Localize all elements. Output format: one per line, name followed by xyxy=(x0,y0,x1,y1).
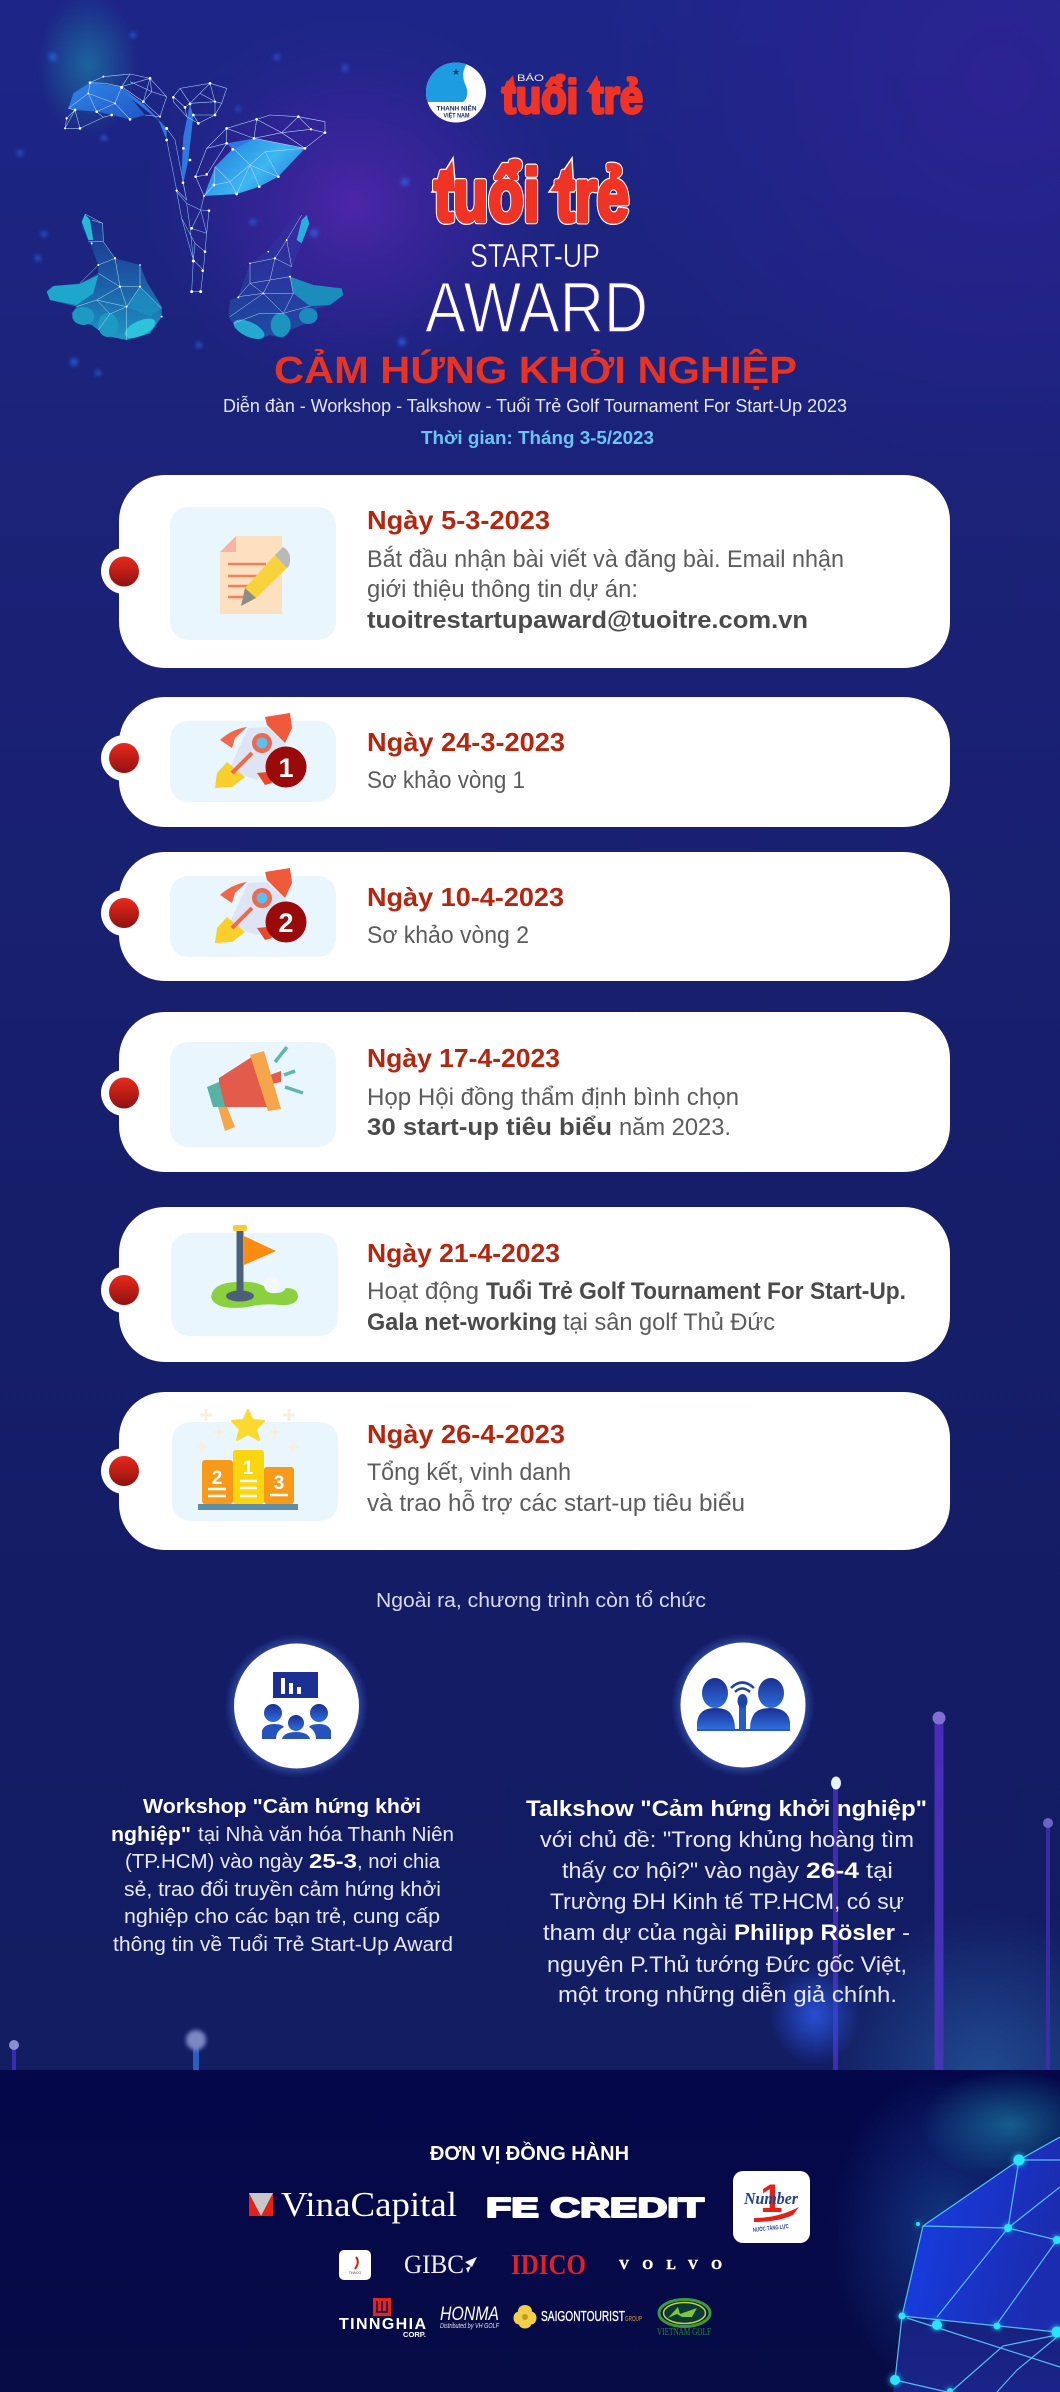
description: Hoạt động xyxy=(367,1278,479,1305)
description: Bắt đầu nhận bài viết và đăng bài. Email nhận xyxy=(367,546,844,573)
icon: podium with star xyxy=(172,1409,338,1521)
logo: Saigontourist xyxy=(514,2305,642,2328)
panel: footer xyxy=(0,2070,1060,2392)
sponsors heading: ĐƠN VỊ ĐỒNG HÀNH xyxy=(430,2141,629,2165)
text: talkshow: nguyên P.Thủ tướng Đức gốc Việt, xyxy=(547,1952,907,1977)
text: workshop: nghiệp cho các bạn trẻ, cung cấp xyxy=(124,1906,440,1928)
panel: card 17-4-2023 xyxy=(101,1012,950,1172)
description xyxy=(367,546,844,634)
description: Sơ khảo vòng 2 xyxy=(367,922,529,949)
description: Họp Hội đồng thẩm định bình chọn xyxy=(367,1084,739,1111)
logo: VinaCapital: VinaCapital xyxy=(281,2185,457,2224)
logo: IDICO: IDICO xyxy=(511,2250,586,2281)
description: giới thiệu thông tin dự án: xyxy=(367,576,638,603)
text: talkshow: Talkshow "Cảm hứng khởi nghiệp" xyxy=(526,1796,927,1821)
icon: podium with star: 1 xyxy=(243,1458,254,1479)
mesh globe xyxy=(890,2137,1060,2392)
date: Ngày 5-3-2023 xyxy=(367,505,550,535)
description: năm 2023. xyxy=(619,1114,731,1141)
logo: Báo Tuổi Trẻ: tuổi trẻ xyxy=(502,70,643,123)
text: workshop: 25-3 xyxy=(309,1851,357,1873)
description: tại sân golf Thủ Đức xyxy=(563,1309,775,1336)
description: và trao hỗ trợ các start-up tiêu biểu xyxy=(367,1490,745,1517)
text: talkshow: Philipp Rösler xyxy=(734,1920,895,1945)
text: workshop: sẻ, trao đổi truyền cảm hứng khởi xyxy=(124,1879,441,1901)
title logo: Tuổi Trẻ: tuổi trẻ xyxy=(434,154,629,237)
icon: workshop circle xyxy=(224,1634,368,1778)
icon: talkshow circle xyxy=(671,1633,815,1777)
description xyxy=(367,1278,906,1336)
middle leaf xyxy=(173,83,227,183)
logo: Thanh Niên Việt Nam: ★ xyxy=(452,67,460,77)
logo: Number 1: Number xyxy=(743,2189,798,2208)
text: talkshow: - xyxy=(902,1920,910,1945)
logo: GIBC: GIBC xyxy=(404,2250,464,2279)
right hand xyxy=(228,215,343,343)
timeline dot xyxy=(109,1275,139,1305)
logo: Saigontourist: SAIGONTOURIST xyxy=(541,2308,625,2325)
icon: rocket 2: 2 xyxy=(278,908,294,938)
logo: Honma: Distributed by VH GOLF xyxy=(440,2323,500,2330)
heading: Cảm hứng khởi nghiệp: CẢM HỨNG KHỞI NGHIỆP xyxy=(274,348,797,392)
icon: golf flag xyxy=(171,1225,338,1336)
title logo: Tuổi Trẻ: tuổi trẻ xyxy=(434,154,629,237)
logo: Thanh Niên Việt Nam: VIỆT NAM xyxy=(444,112,470,120)
text: talkshow xyxy=(526,1796,927,2007)
logo: Tin Nghia xyxy=(339,2298,426,2339)
date: Ngày 10-4-2023 xyxy=(367,882,564,912)
timeline dot xyxy=(109,743,139,773)
description: Tuổi Trẻ Golf Tournament For Start-Up. xyxy=(486,1278,906,1305)
subtitle: Diễn đàn - Workshop - Talkshow - Tuổi Trẻ Golf Tournament For Start-Up 2023 xyxy=(223,395,847,416)
logo: Saigontourist: GROUP xyxy=(625,2316,642,2323)
text: workshop: thông tin về Tuổi Trẻ Start-Up Award xyxy=(113,1934,453,1956)
description: 30 start-up tiêu biểu xyxy=(367,1114,612,1141)
right leaf xyxy=(196,115,325,196)
date: Ngày 26-4-2023 xyxy=(367,1419,565,1449)
date: Ngày 17-4-2023 xyxy=(367,1043,560,1073)
icon: podium with star: 3 xyxy=(274,1473,284,1494)
timeline dot xyxy=(109,1078,139,1108)
text: workshop: (TP.HCM) vào ngày xyxy=(125,1851,303,1873)
icon: rocket 1: 1 xyxy=(278,753,294,783)
logo: Volvo: VOLVO xyxy=(619,2258,722,2273)
intro line: Ngoài ra: Ngoài ra, chương trình còn tổ chức xyxy=(376,1590,706,1612)
panel: card 26-4-2023 xyxy=(101,1392,950,1550)
description: Tổng kết, vinh danh xyxy=(367,1459,571,1486)
description xyxy=(367,1084,739,1141)
text: talkshow: tại xyxy=(866,1858,893,1883)
text: talkshow: với chủ đề: "Trong khủng hoàng tìm xyxy=(540,1827,914,1852)
left leaf xyxy=(65,74,167,140)
text: workshop: Workshop "Cảm hứng khởi xyxy=(143,1796,421,1818)
logo: Number 1 xyxy=(733,2171,810,2243)
logo: Honma: HONMA xyxy=(440,2304,499,2325)
description: tuoitrestartupaward@tuoitre.com.vn xyxy=(367,607,808,634)
icon: rocket 2 xyxy=(170,868,336,957)
description: Sơ khảo vòng 1 xyxy=(367,767,525,794)
icon: rocket 1 xyxy=(170,713,336,802)
timeline dot xyxy=(109,556,139,586)
logo: Vietnam Golf xyxy=(657,2300,711,2338)
logo: Thanh Niên Việt Nam: THANH NIÊN xyxy=(436,104,476,112)
text: talkshow: tham dự của ngài xyxy=(543,1920,727,1945)
timeline dot xyxy=(109,898,139,928)
logo: Báo Tuổi Trẻ: BÁO xyxy=(517,73,544,84)
text: talkshow: 26-4 xyxy=(806,1858,860,1883)
logo: small white tile: THACO xyxy=(349,2271,361,2275)
logo: small white tile xyxy=(339,2250,371,2280)
background sparkle dots xyxy=(17,32,409,376)
icon: podium with star: 2 xyxy=(212,1468,222,1489)
icon: megaphone xyxy=(170,1042,336,1147)
logo: Thanh Niên Việt Nam xyxy=(426,62,486,122)
logo: Number 1: NƯỚC TĂNG LỰC xyxy=(752,2222,790,2234)
logo: FE Credit: FE CREDIT xyxy=(486,2192,704,2223)
title: AWARD: AWARD xyxy=(425,269,648,348)
text: workshop: nghiệp" xyxy=(111,1824,191,1846)
decorative light beams xyxy=(9,1712,1053,2070)
mesh nodes xyxy=(64,76,326,318)
title: START-UP: START-UP xyxy=(470,237,600,274)
timeline dot xyxy=(109,1456,139,1486)
text: talkshow: một trong những diễn giả chính. xyxy=(558,1982,897,2007)
text: workshop xyxy=(111,1796,454,1956)
panel: card 5-3-2023 xyxy=(101,475,950,668)
panel: card 10-4-2023 xyxy=(101,852,950,981)
logo: Number 1: 1 xyxy=(760,2177,783,2221)
description: Gala net-working xyxy=(367,1309,557,1336)
date: Ngày 21-4-2023 xyxy=(367,1238,560,1268)
panel: card 24-3-2023 xyxy=(101,697,950,827)
stem xyxy=(167,128,209,292)
panel: card 21-4-2023 xyxy=(101,1207,950,1362)
date: Ngày 24-3-2023 xyxy=(367,727,565,757)
text: workshop: , nơi chia xyxy=(357,1851,441,1873)
time line: Thời gian: Tháng 3-5/2023 xyxy=(421,428,654,448)
description xyxy=(367,1459,745,1517)
logo: Vietnam Golf: VIETNAM GOLF xyxy=(657,2327,711,2338)
left hand xyxy=(47,214,162,342)
logo: Tin Nghia: CORP. xyxy=(403,2332,426,2339)
text: workshop: tại Nhà văn hóa Thanh Niên xyxy=(198,1824,454,1846)
text: talkshow: Trường ĐH Kinh tế TP.HCM, có sự xyxy=(550,1889,904,1914)
icon: document and pencil xyxy=(170,507,336,640)
illustration: low-poly plant held by hands xyxy=(47,74,343,343)
logo: Tin Nghia: TINNGHIA xyxy=(339,2316,426,2333)
text: talkshow: thấy cơ hội?" vào ngày xyxy=(562,1858,799,1883)
